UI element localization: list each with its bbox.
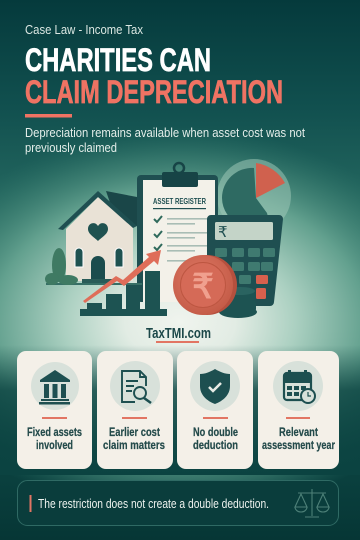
- icon: calculator: [207, 215, 283, 306]
- card: earlier cost: Earlier cost: [109, 427, 160, 439]
- title line 1: CHARITIES CAN: [25, 42, 211, 78]
- card: no double deduction: No double: [193, 427, 238, 439]
- icon: clipboard asset register: ASSET REGISTER: [153, 197, 206, 206]
- icon: coin stack: [219, 287, 257, 318]
- icon: rupee coin: ₹: [192, 268, 214, 306]
- icon: bar chart: [80, 271, 167, 316]
- callout text: The restriction does not create a double deduction.: [38, 496, 269, 511]
- illustration: [45, 159, 291, 318]
- card: no double deduction: [177, 351, 253, 469]
- eyebrow: Case Law - Income Tax: [25, 23, 144, 37]
- icon: bushes: [45, 248, 78, 285]
- title underline: [25, 114, 72, 118]
- icon: document with magnifier: [122, 371, 151, 403]
- subtitle: [25, 125, 305, 155]
- icon: scales of justice: [295, 489, 329, 517]
- subtitle: Depreciation remains available when asset cost was not: [25, 125, 305, 140]
- card: assessment year: Relevant: [279, 427, 318, 439]
- icon: calendar and clock: [283, 370, 315, 403]
- callout accent bar: [30, 495, 32, 512]
- callout banner: [18, 480, 338, 526]
- card: assessment year: [258, 351, 339, 469]
- icon: growth arrow: [83, 250, 161, 303]
- card: fixed assets: involved: [36, 440, 73, 452]
- icon: rupee coin: [173, 255, 237, 315]
- icon: calculator: ₹: [218, 224, 228, 241]
- icon: pie chart: [217, 159, 291, 233]
- card: fixed assets: Fixed assets: [27, 427, 82, 439]
- card: fixed assets: [17, 351, 92, 469]
- subtitle: previously claimed: [25, 140, 117, 155]
- brand: TaxTMI.com: [146, 326, 211, 342]
- icon: house: [46, 191, 142, 285]
- icon: clipboard asset register: [137, 163, 218, 302]
- icon: shield: [200, 369, 230, 404]
- icon: bank building: [39, 370, 70, 404]
- card: assessment year: assessment year: [262, 440, 335, 452]
- card: no double deduction: deduction: [193, 440, 238, 452]
- card: earlier cost: [97, 351, 173, 469]
- card: earlier cost: claim matters: [103, 440, 165, 452]
